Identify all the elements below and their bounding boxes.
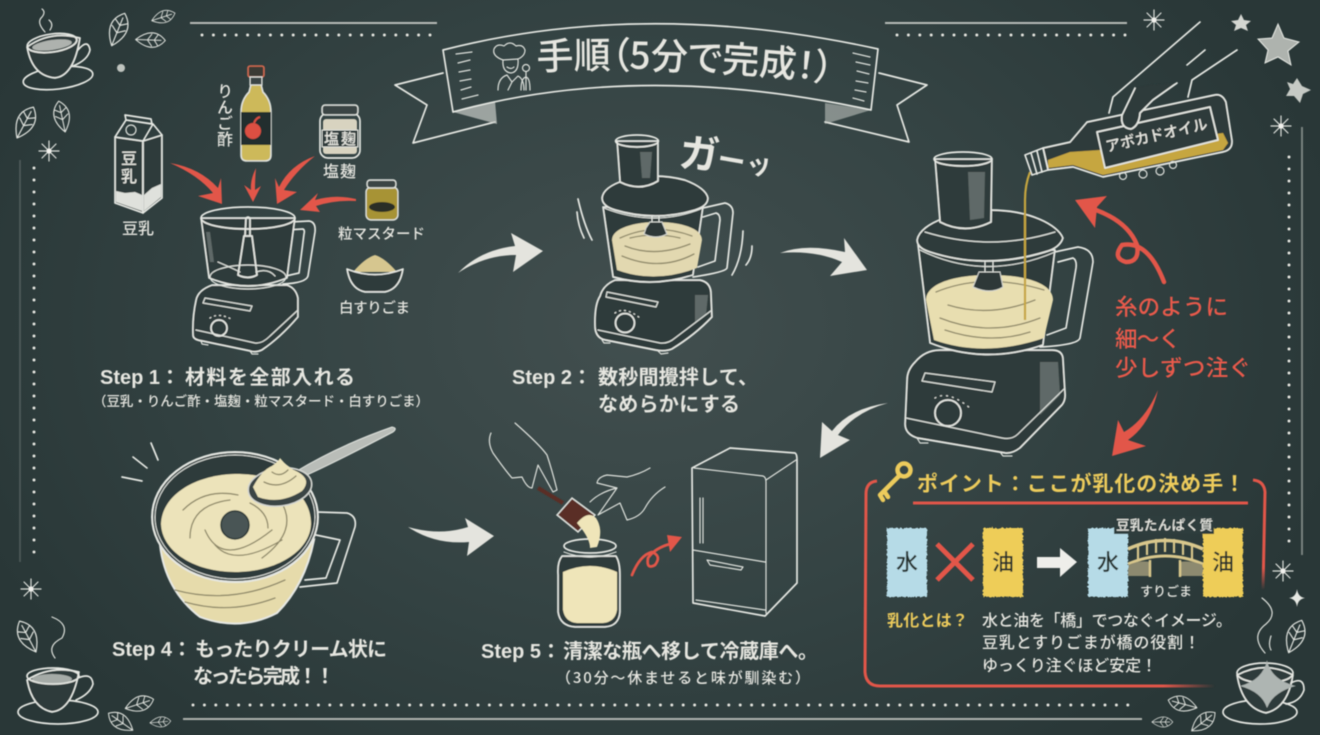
label: grain mustard: 粒マスタード xyxy=(338,223,425,244)
left chalk line and dots xyxy=(20,160,34,562)
arrow: to point panel xyxy=(1112,390,1158,456)
icon: ground sesame bowl xyxy=(347,255,403,292)
icon: soy milk carton: 乳 xyxy=(121,163,137,187)
icon: hand holding oil bottle xyxy=(1025,22,1237,320)
arrows: ingredients into bowl xyxy=(170,156,356,212)
step 5 caption: Step 5： xyxy=(481,641,561,663)
bridge diagram: 水 xyxy=(1097,545,1119,577)
icon: bottom-left coffee cup xyxy=(12,579,171,735)
sound effect text: ガ xyxy=(677,120,723,182)
step 4 caption: なったら完成！！ xyxy=(193,660,335,689)
callout: pour slowly: 少しずつ注ぐ xyxy=(1115,351,1251,383)
step 2 caption: 数秒間攪拌して、 xyxy=(598,361,758,390)
step 1 illustration: ingredients and processor xyxy=(115,66,425,354)
curly arrow xyxy=(632,544,670,575)
icon: shio koji jar xyxy=(320,105,360,158)
explanation: 水と油を「橋」でつなぐイメージ。 xyxy=(982,607,1232,631)
ribbon right tail xyxy=(825,73,927,142)
icon: top-left coffee cup xyxy=(22,9,94,93)
arrow: becomes xyxy=(1037,548,1077,577)
icon: left sparkle xyxy=(39,141,59,161)
label: apple vinegar: りんご酢 xyxy=(213,83,237,147)
icon: hand holding oil bottle: アボカドオイル xyxy=(1103,113,1209,157)
arrow: step 1 to step 2 xyxy=(458,233,543,273)
step 2 caption: Step 2： xyxy=(512,367,592,389)
step 5 illustration: jar, hands, fridge xyxy=(489,423,797,627)
label: soy milk: 豆乳 xyxy=(122,215,154,239)
step 2 illustration: processor mixing xyxy=(577,135,752,354)
bottom chalk line and dots xyxy=(183,705,1142,719)
sound effect text: ッ xyxy=(743,143,775,184)
step 5 caption: （30分〜休ませると味が馴染む） xyxy=(556,667,810,688)
icon: top-left leaves xyxy=(10,7,177,142)
icon: chef xyxy=(494,43,530,90)
oil bottle xyxy=(1043,95,1232,177)
step 4 caption: Step 4： xyxy=(112,639,192,661)
ribbon left tail xyxy=(395,73,495,143)
arrow: step 2 to step 3 xyxy=(780,238,867,276)
step 1 caption: Step 1： xyxy=(100,367,180,389)
step 1 caption: 材料を全部入れる xyxy=(185,361,355,390)
arrow: step 3 to step 4 xyxy=(820,403,888,458)
sound effect text: ー xyxy=(714,137,749,182)
spoon xyxy=(295,427,395,478)
oil box: 油 xyxy=(992,545,1014,577)
ribbon main band xyxy=(443,24,878,112)
step 4 caption xyxy=(112,633,387,689)
motion lines xyxy=(577,199,752,275)
oil box xyxy=(983,528,1023,597)
step 3 illustration: processor with oil xyxy=(905,152,1093,456)
water box: 水 xyxy=(896,545,918,577)
icon: soy milk carton xyxy=(115,115,162,213)
label: ground sesame: 白すりごま xyxy=(339,297,410,318)
cross mark xyxy=(937,544,973,580)
hands xyxy=(489,423,557,492)
step 1 caption: （豆乳・りんご酢・塩麹・粒マスタード・白すりごま） xyxy=(93,390,429,410)
hand wrist xyxy=(1109,22,1237,113)
thumb over bottle xyxy=(1122,83,1177,129)
step 1 caption xyxy=(93,361,429,410)
step 4 illustration: finished cream in bowl xyxy=(122,427,395,624)
arrow: step 4 to step 5 xyxy=(408,518,494,556)
step 2 caption: なめらかにする xyxy=(598,388,740,417)
icon: shio koji jar: 塩麹 xyxy=(324,128,356,149)
callout: pour slowly: 糸のように xyxy=(1115,290,1228,322)
explanation: 豆乳とすりごまが橋の役割！ xyxy=(982,629,1200,653)
top-left chalk line and dots xyxy=(190,23,437,35)
sound effect text xyxy=(677,120,775,184)
icon: key xyxy=(880,464,910,500)
jar xyxy=(558,556,620,627)
explanation xyxy=(887,607,1232,676)
icon: soy milk carton: 豆 xyxy=(121,145,137,169)
step 4 caption: もったりクリーム状に xyxy=(195,633,387,662)
step 5 caption: 清潔な瓶へ移して冷蔵庫へ。 xyxy=(563,635,818,664)
fridge xyxy=(692,448,797,616)
heading: 手順（5分で完成！） xyxy=(538,36,826,84)
icon: star cluster top-right xyxy=(1144,10,1311,136)
label: shio koji: 塩麹 xyxy=(323,158,356,182)
icon: apple vinegar bottle xyxy=(241,66,271,161)
step 2 caption xyxy=(512,361,758,417)
bridge diagram: すりごま xyxy=(1140,581,1192,600)
icon: food processor empty xyxy=(193,207,315,354)
spatula xyxy=(538,488,563,503)
top-right chalk line and dots xyxy=(885,23,1127,35)
arrow: thin pour loop xyxy=(1075,196,1164,282)
panel: emulsification point xyxy=(865,464,1265,686)
callout: pour slowly xyxy=(1115,290,1251,383)
explanation: ゆっくり注ぐほど安定！ xyxy=(982,652,1157,676)
icon: grain mustard jar xyxy=(366,180,398,220)
underline xyxy=(913,502,1248,504)
icon: bottom-right coffee cup xyxy=(1152,561,1310,735)
oil stream xyxy=(1025,172,1030,320)
explanation: 乳化とは？ xyxy=(887,607,968,631)
sparkle rays xyxy=(122,443,158,481)
bridge diagram: 油 xyxy=(1212,545,1234,577)
panel border xyxy=(865,481,1215,686)
callout: pour slowly: 細〜く xyxy=(1115,322,1181,354)
title ribbon xyxy=(394,22,928,144)
water box xyxy=(887,528,927,597)
point heading: ポイント：ここが乳化の決め手！ xyxy=(917,468,1245,498)
right chalk line and dots xyxy=(1289,127,1302,555)
bridge diagram: 豆乳たんぱく質 xyxy=(1116,514,1213,534)
step 5 caption xyxy=(481,635,818,688)
bridge diagram xyxy=(1088,514,1243,600)
